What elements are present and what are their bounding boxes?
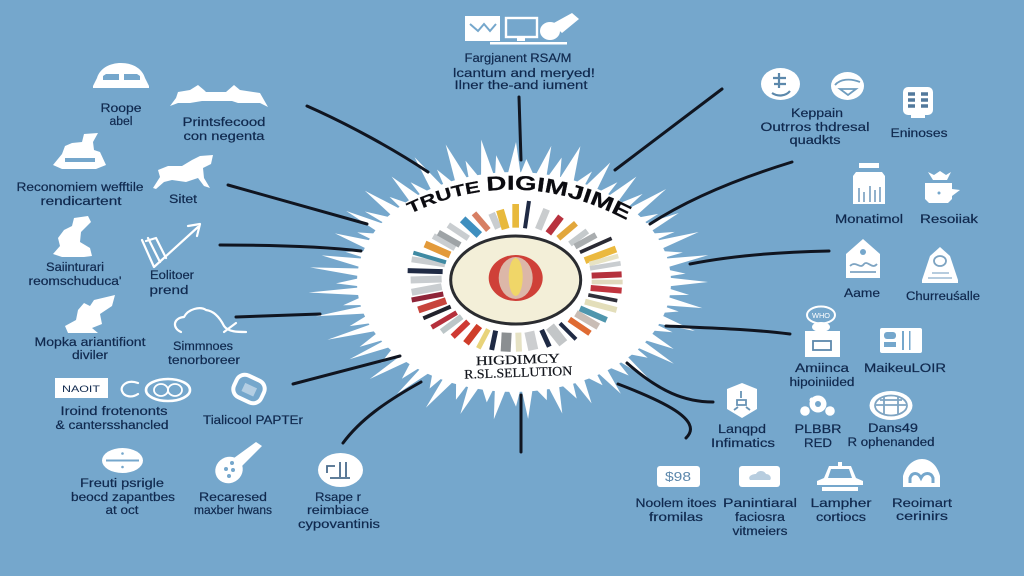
item: Printsfecood bbox=[170, 85, 268, 143]
item: Amiinca: hipoiniided bbox=[790, 377, 854, 389]
item: Monatimol: Monatimol bbox=[835, 214, 903, 226]
item: Saiinturari: Saiinturari bbox=[46, 262, 104, 274]
item: Freuti: Freuti psrigle bbox=[80, 478, 164, 490]
curved title: TRUTE DIGIMJIME bbox=[406, 176, 632, 220]
item: Rsape: reimbiace bbox=[307, 505, 369, 517]
item: top: lcantum and meryed! bbox=[453, 68, 595, 80]
item: Tialicool bbox=[203, 372, 303, 427]
item: Freuti: beocd zapantbes bbox=[71, 492, 175, 504]
icon: cloud card bbox=[739, 466, 780, 487]
item: Eolitoer: Eolitoer bbox=[150, 270, 194, 282]
item: MaikeuLOIR: MaikeuLOIR bbox=[864, 363, 946, 375]
item: Roope: abel bbox=[110, 116, 132, 128]
icon: desk bbox=[53, 133, 106, 169]
item: Recaresed: maxber hwans bbox=[194, 505, 272, 517]
icon: car bbox=[817, 462, 863, 491]
item: Lanqpd: Infimatics bbox=[711, 438, 775, 450]
icon: globe bbox=[870, 391, 912, 420]
item: Simmnoes bbox=[168, 308, 246, 367]
item: Lampher bbox=[810, 462, 872, 524]
item: Panintiaral: Panintiaral bbox=[723, 498, 797, 510]
item: Roope: Roope bbox=[100, 103, 142, 115]
icon: circle with symbol bbox=[318, 453, 363, 487]
item: Printsfecood: con negenta bbox=[184, 131, 265, 143]
central starburst bbox=[308, 139, 710, 420]
item: Churreusalle: Churreuśalle bbox=[906, 291, 980, 303]
icon: running animal bbox=[153, 155, 213, 189]
icon: server bbox=[903, 87, 933, 118]
center subtitle bbox=[464, 350, 573, 382]
item: top: Fargjanent RSA/M bbox=[464, 53, 572, 65]
item: top: Ilner the-and iument bbox=[454, 80, 589, 92]
colored tick ring bbox=[408, 201, 623, 352]
icon: jar bbox=[853, 163, 885, 204]
connector lines bbox=[220, 89, 829, 452]
item: Panintiaral bbox=[723, 466, 797, 538]
icon: cloud dots bbox=[800, 396, 835, 416]
item: Reoimart: Reoimart bbox=[892, 498, 953, 510]
item: Resoiiak: Resoiiak bbox=[920, 214, 978, 226]
item: Noolem: Noolem itoes bbox=[636, 498, 717, 510]
item: Reconomiem: rendicartent bbox=[40, 196, 123, 208]
icon: money card: $98 bbox=[665, 469, 691, 484]
icon: rounded tag bbox=[230, 372, 268, 406]
central emblem bbox=[451, 236, 581, 324]
icon: pot bbox=[925, 171, 960, 203]
icon: printer shape bbox=[170, 85, 268, 107]
item: Eolitoer bbox=[142, 224, 200, 297]
item: Panintiaral: faciosra bbox=[735, 512, 786, 524]
icon pair: two round badges bbox=[761, 68, 864, 100]
item: Rsape: cypovantinis bbox=[298, 519, 380, 531]
item: Aame: Aame bbox=[844, 288, 880, 300]
icon: check arrow bbox=[142, 224, 200, 267]
item: Dans49: R ophenanded bbox=[848, 437, 934, 449]
item: Noolem bbox=[636, 466, 717, 524]
item: Lampher: cortiocs bbox=[816, 512, 866, 524]
item: Saiinturari: reomschuduca' bbox=[28, 276, 122, 288]
item: Simmnoes: Simmnoes bbox=[173, 341, 233, 353]
item: Mopka bbox=[34, 295, 146, 362]
item: Reoimart: cerinirs bbox=[896, 511, 948, 523]
item: Iroind: & cantersshancled bbox=[56, 420, 168, 432]
item: top bbox=[453, 13, 595, 92]
item: Mopka: diviler bbox=[72, 350, 108, 362]
icon: person badge: WHO bbox=[812, 313, 831, 320]
item: Iroind: Iroind frotenonts bbox=[60, 406, 168, 418]
icon: robot arm bbox=[53, 216, 92, 257]
item: Reconomiem bbox=[16, 133, 144, 208]
item: Dans49 bbox=[848, 391, 934, 449]
item: PLBBR: PLBBR bbox=[794, 424, 842, 436]
item: Keppain bbox=[760, 68, 870, 147]
item: Sitet: Sitet bbox=[169, 194, 198, 206]
item: Eninoses bbox=[890, 87, 948, 140]
item: Sitet bbox=[153, 155, 213, 206]
item: Freuti bbox=[71, 448, 175, 517]
item: Noolem: fromilas bbox=[649, 512, 703, 524]
item: Mopka: Mopka ariantifiont bbox=[34, 337, 146, 349]
item: Monatimol bbox=[835, 163, 903, 226]
icon: bird bbox=[65, 295, 115, 333]
icon: mail, monitor, wrench bbox=[465, 13, 579, 44]
item: Eolitoer: prend bbox=[150, 285, 188, 297]
center subtitle: R.SL.SELLUTION bbox=[464, 363, 573, 382]
item: Keppain: Keppain bbox=[791, 108, 843, 120]
icon: badge and rings: NAOIT bbox=[62, 384, 101, 394]
icon: dome bbox=[93, 63, 149, 88]
icon: cloud bbox=[175, 308, 246, 332]
item: MaikeuLOIR bbox=[864, 328, 946, 375]
item: Amiinca bbox=[790, 306, 854, 389]
item: Tialicool: Tialicool PAPTEr bbox=[203, 415, 303, 427]
item: Reconomiem: Reconomiem wefftile bbox=[16, 182, 144, 194]
item: Aame bbox=[844, 239, 880, 300]
icon: book bbox=[880, 328, 922, 353]
item: PLBBR: RED bbox=[804, 438, 832, 450]
icon: guitar bbox=[210, 442, 262, 488]
item: Lanqpd: Lanqpd bbox=[718, 424, 766, 436]
item: PLBBR bbox=[794, 396, 842, 450]
item: Keppain: Outrros thdresal bbox=[760, 122, 870, 134]
item: Saiinturari bbox=[28, 216, 122, 288]
item: Reoimart bbox=[892, 459, 953, 523]
icon: tag house bbox=[846, 239, 880, 278]
icon: shield bbox=[727, 383, 757, 418]
item: Recaresed: Recaresed bbox=[199, 492, 267, 504]
item: Freuti: at oct bbox=[106, 505, 139, 517]
item: Churreusalle bbox=[906, 247, 980, 303]
item: Keppain: quadkts bbox=[790, 135, 841, 147]
item: Rsape: Rsape r bbox=[315, 492, 361, 504]
item: Recaresed bbox=[194, 442, 272, 517]
item: Panintiaral: vitmeiers bbox=[732, 526, 788, 538]
icon: triangle bell bbox=[922, 247, 958, 283]
item: Amiinca: Amiinca bbox=[795, 363, 850, 375]
item: Iroind bbox=[55, 378, 190, 432]
item: Printsfecood: Printsfecood bbox=[182, 117, 266, 129]
item: Simmnoes: tenorboreer bbox=[168, 355, 240, 367]
item: Resoiiak bbox=[920, 171, 978, 226]
center subtitle: HIGDIMCY bbox=[476, 350, 561, 368]
item: Eninoses: Eninoses bbox=[890, 128, 948, 140]
icon: arch bbox=[903, 459, 940, 487]
item: Roope bbox=[93, 63, 149, 128]
item: Rsape bbox=[298, 453, 380, 531]
item: Lanqpd bbox=[711, 383, 775, 450]
icon: divide ellipse bbox=[102, 448, 143, 473]
item: Dans49: Dans49 bbox=[868, 423, 918, 435]
item: Lampher: Lampher bbox=[810, 498, 872, 510]
